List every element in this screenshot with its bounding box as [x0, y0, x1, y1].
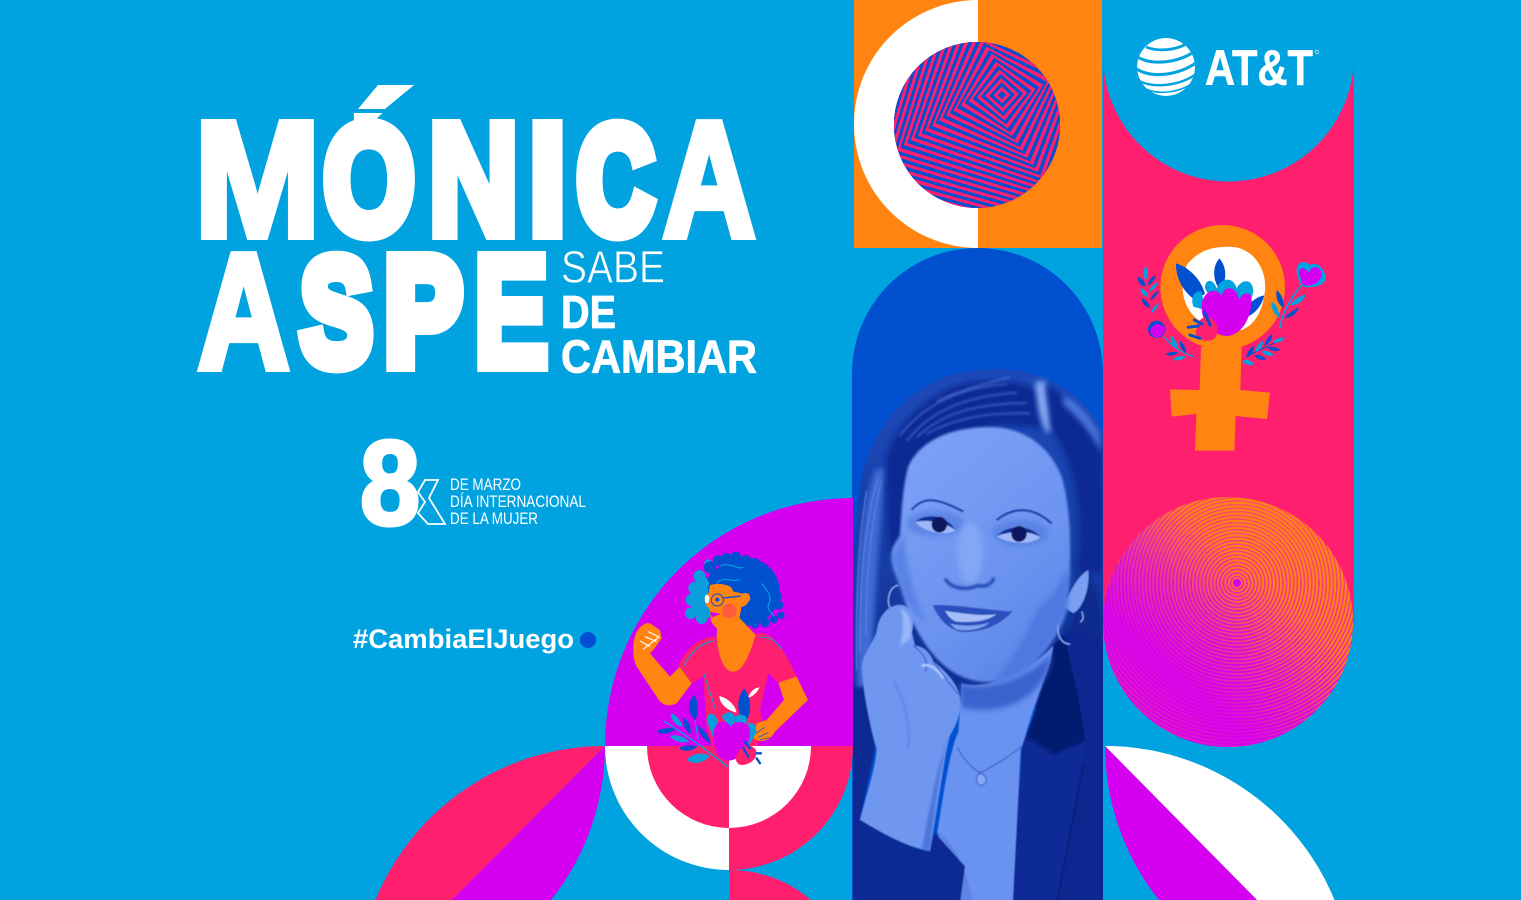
- name: Mónica: C: [577, 95, 654, 264]
- glasses: [705, 594, 742, 606]
- name: Mónica: Ó: [324, 94, 415, 267]
- name: Mónica: A: [663, 89, 755, 272]
- magenta fade: [1103, 497, 1353, 747]
- globe: [1135, 38, 1197, 96]
- date line 3: DE LA MUJER: [450, 510, 538, 528]
- quarter circles tile: [605, 746, 853, 900]
- lips: [710, 612, 721, 617]
- shirt details: [683, 637, 782, 708]
- nose: [945, 578, 994, 588]
- pink lower arc: [729, 870, 811, 900]
- logo: AT&T: [1135, 38, 1319, 96]
- concentric ring disc: [1103, 497, 1353, 747]
- ear: [1065, 570, 1089, 613]
- leaf shape bottom left: [376, 746, 605, 900]
- logo: 8 de marzo: [360, 417, 586, 551]
- panel: pink column: [1103, 0, 1354, 622]
- hair: [852, 369, 1104, 708]
- white inner quarter: [729, 746, 811, 828]
- name: Aspe: [198, 220, 548, 404]
- numeral 8: 8: [360, 417, 420, 551]
- banner artwork: [196, 0, 1354, 900]
- orange square: [854, 0, 1102, 248]
- sleeve: [852, 808, 965, 900]
- hashtag text: #CambiaElJuego: [353, 624, 574, 654]
- symbol ring: [1160, 225, 1285, 350]
- hair fringe: [707, 567, 760, 594]
- blue hair: [704, 552, 785, 628]
- white centre: [1183, 247, 1265, 330]
- name: Mónica: M: [194, 87, 321, 272]
- icon: female symbol with flowers: [1137, 225, 1326, 451]
- date line 1: DE MARZO: [450, 476, 521, 494]
- necklace: [957, 746, 1021, 785]
- ring: [922, 665, 943, 679]
- name: Mónica: N: [429, 92, 519, 268]
- date line 2: DÍA INTERNACIONAL: [450, 492, 586, 511]
- neck and chest: [937, 646, 1053, 900]
- face: [892, 427, 1070, 682]
- eyebrows: [912, 500, 1052, 524]
- name: Aspe: E: [474, 224, 548, 401]
- white half disc: [854, 0, 978, 248]
- pink quarter ring: [729, 746, 853, 870]
- fist lines: [640, 632, 659, 649]
- leaf shape bottom right: [1105, 746, 1334, 900]
- tagline: sabe: SABE: [561, 242, 665, 292]
- blue arch: [852, 248, 1103, 900]
- magenta quarter circle: [605, 498, 853, 746]
- left arm: [633, 623, 692, 705]
- jacket: [1003, 632, 1105, 900]
- panel: orange square with pattern: [854, 0, 1102, 248]
- name: Aspe: A: [198, 220, 289, 404]
- lower right sprig: [1242, 334, 1285, 365]
- wordmark: AT&T: [1205, 40, 1313, 96]
- registered mark: [1315, 50, 1319, 54]
- hand on hip lines: [756, 727, 770, 740]
- blue dot: [580, 632, 596, 648]
- pink inner quarter: [647, 746, 729, 828]
- name: Mónica: I: [525, 87, 570, 272]
- centre dot: [1233, 579, 1241, 587]
- hashtag: [353, 624, 596, 654]
- pink half: [376, 746, 605, 900]
- portrait photo: [852, 369, 1105, 900]
- left eye: [915, 520, 956, 534]
- disc base: [1103, 497, 1353, 747]
- head: [705, 584, 749, 631]
- magenta half: [1105, 746, 1257, 900]
- tagline: de: DE: [561, 286, 616, 338]
- hair curls: [717, 565, 773, 616]
- mouth: [933, 605, 1013, 632]
- left sprig: [1137, 266, 1159, 313]
- op-art spiral circle: [894, 42, 1060, 208]
- earrings: [888, 585, 1083, 644]
- orange rings: [1103, 497, 1353, 747]
- bouquet: [657, 687, 761, 767]
- illustration: woman with flowers: [633, 552, 808, 767]
- cyan hair: [685, 559, 718, 624]
- magenta half: [452, 746, 605, 900]
- symbol stem and bar: [1170, 347, 1270, 451]
- right arm: [753, 677, 808, 741]
- white half: [1105, 746, 1334, 900]
- tagline: cambiar: CAMBIAR: [561, 330, 757, 382]
- name: Aspe: S: [301, 227, 372, 396]
- bouquet in ring: [1176, 258, 1264, 341]
- name: Aspe: P: [385, 226, 462, 397]
- blue semicircle: [1103, 0, 1354, 182]
- shoulder left: [852, 687, 875, 820]
- shirt: [678, 633, 797, 750]
- hand: [860, 605, 960, 851]
- right sprig: [1271, 262, 1326, 328]
- title: [194, 85, 757, 404]
- right eye: [996, 532, 1041, 544]
- chevron outline: [418, 480, 445, 524]
- panel: blue arch with portrait: [852, 248, 1105, 900]
- white quarter ring: [605, 746, 729, 870]
- name: Mónica: [200, 85, 756, 242]
- ear: [740, 593, 750, 603]
- neck and chest: [717, 617, 756, 672]
- blush: [722, 604, 737, 618]
- pink column body: [1103, 0, 1354, 622]
- lower left flower: [1148, 321, 1193, 360]
